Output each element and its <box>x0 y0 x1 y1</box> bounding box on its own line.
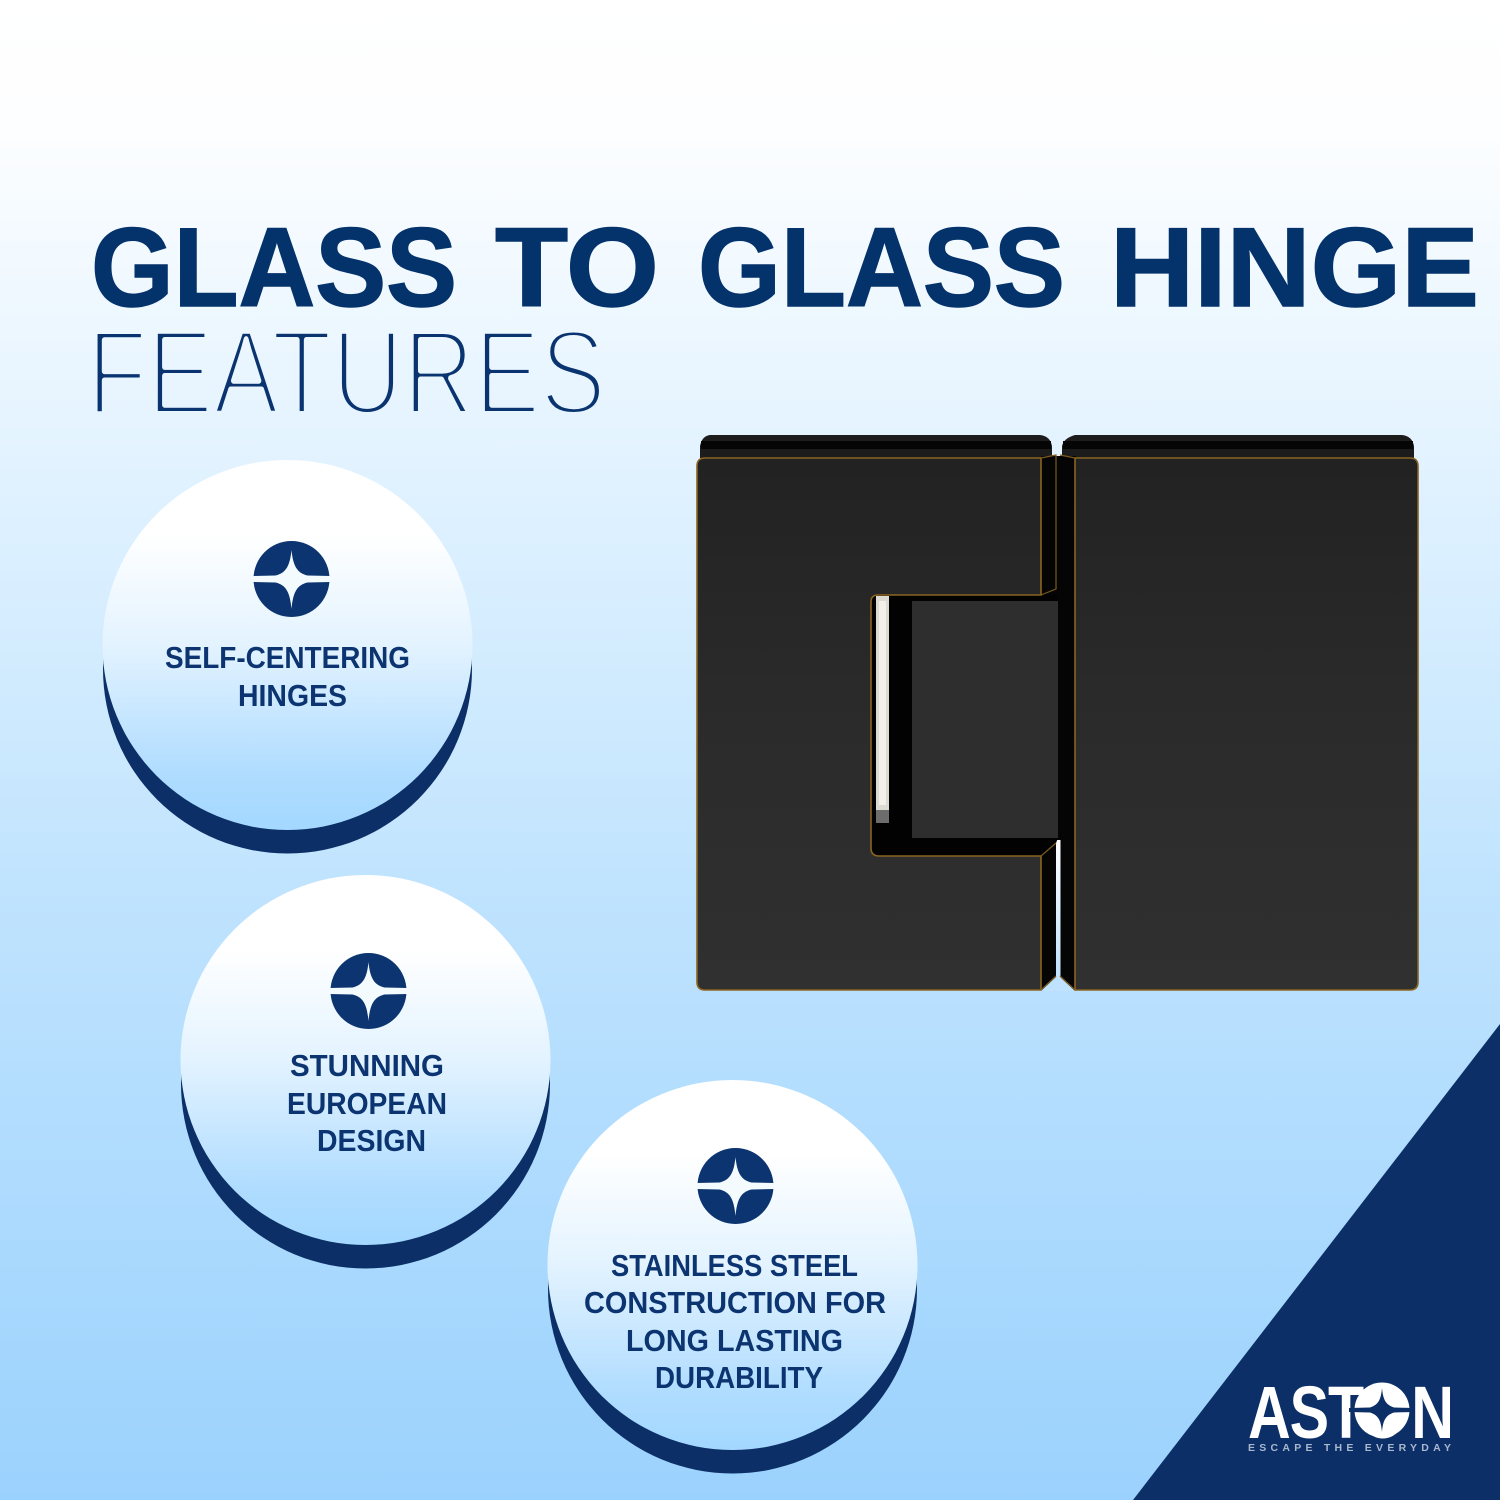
label: stunning european design: DESIGN <box>317 1123 426 1158</box>
logo tagline: ESCAPE THE EVERYDAY <box>1248 1442 1451 1454</box>
feature card: stainless steel construction <box>548 1080 918 1474</box>
title: GLASS <box>698 205 1065 330</box>
feature card: self-centering hinges <box>102 460 472 854</box>
right plate <box>1075 458 1418 990</box>
gold bevel lines <box>1041 455 1075 990</box>
label: stunning european design <box>287 1048 447 1158</box>
label: self-centering hinges <box>165 640 410 713</box>
title <box>87 205 1479 440</box>
label: stainless steel construction: CONSTRUCTION FOR <box>584 1285 886 1320</box>
bottom gap <box>1041 977 1075 991</box>
feature card: stunning european design <box>180 875 550 1268</box>
icon: star badge <box>252 541 330 617</box>
label: stainless steel construction: STAINLESS STEEL <box>611 1248 858 1283</box>
label: self-centering hinges: SELF-CENTERING <box>165 640 410 675</box>
title: GLASS <box>91 205 457 330</box>
lower white slit <box>1056 840 1060 978</box>
center black strip <box>1041 456 1076 990</box>
notch interior <box>870 594 1058 857</box>
label: stunning european design: STUNNING <box>290 1048 444 1083</box>
left plate <box>697 458 1041 990</box>
icon: star badge <box>696 1148 774 1224</box>
top ledge right <box>1062 435 1414 458</box>
title: FEATURES <box>87 304 606 440</box>
label: self-centering hinges: HINGES <box>238 678 347 713</box>
label: stainless steel construction <box>584 1248 886 1395</box>
label: stainless steel construction: LONG LASTING <box>626 1323 843 1358</box>
title: HINGE <box>1110 205 1479 330</box>
steel bar <box>876 596 889 810</box>
corner triangle <box>1133 1024 1500 1500</box>
icon: star badge <box>330 953 408 1029</box>
inner hinge block <box>912 601 1058 838</box>
label: stunning european design: EUROPEAN <box>287 1086 447 1121</box>
top ledge left <box>700 435 1052 458</box>
title: TO <box>495 205 659 330</box>
logo: aston: ASTON <box>1248 1372 1454 1455</box>
logo star mark <box>1349 1382 1415 1438</box>
hinge product illustration <box>697 435 1418 991</box>
label: stainless steel construction: DURABILITY <box>655 1360 823 1395</box>
